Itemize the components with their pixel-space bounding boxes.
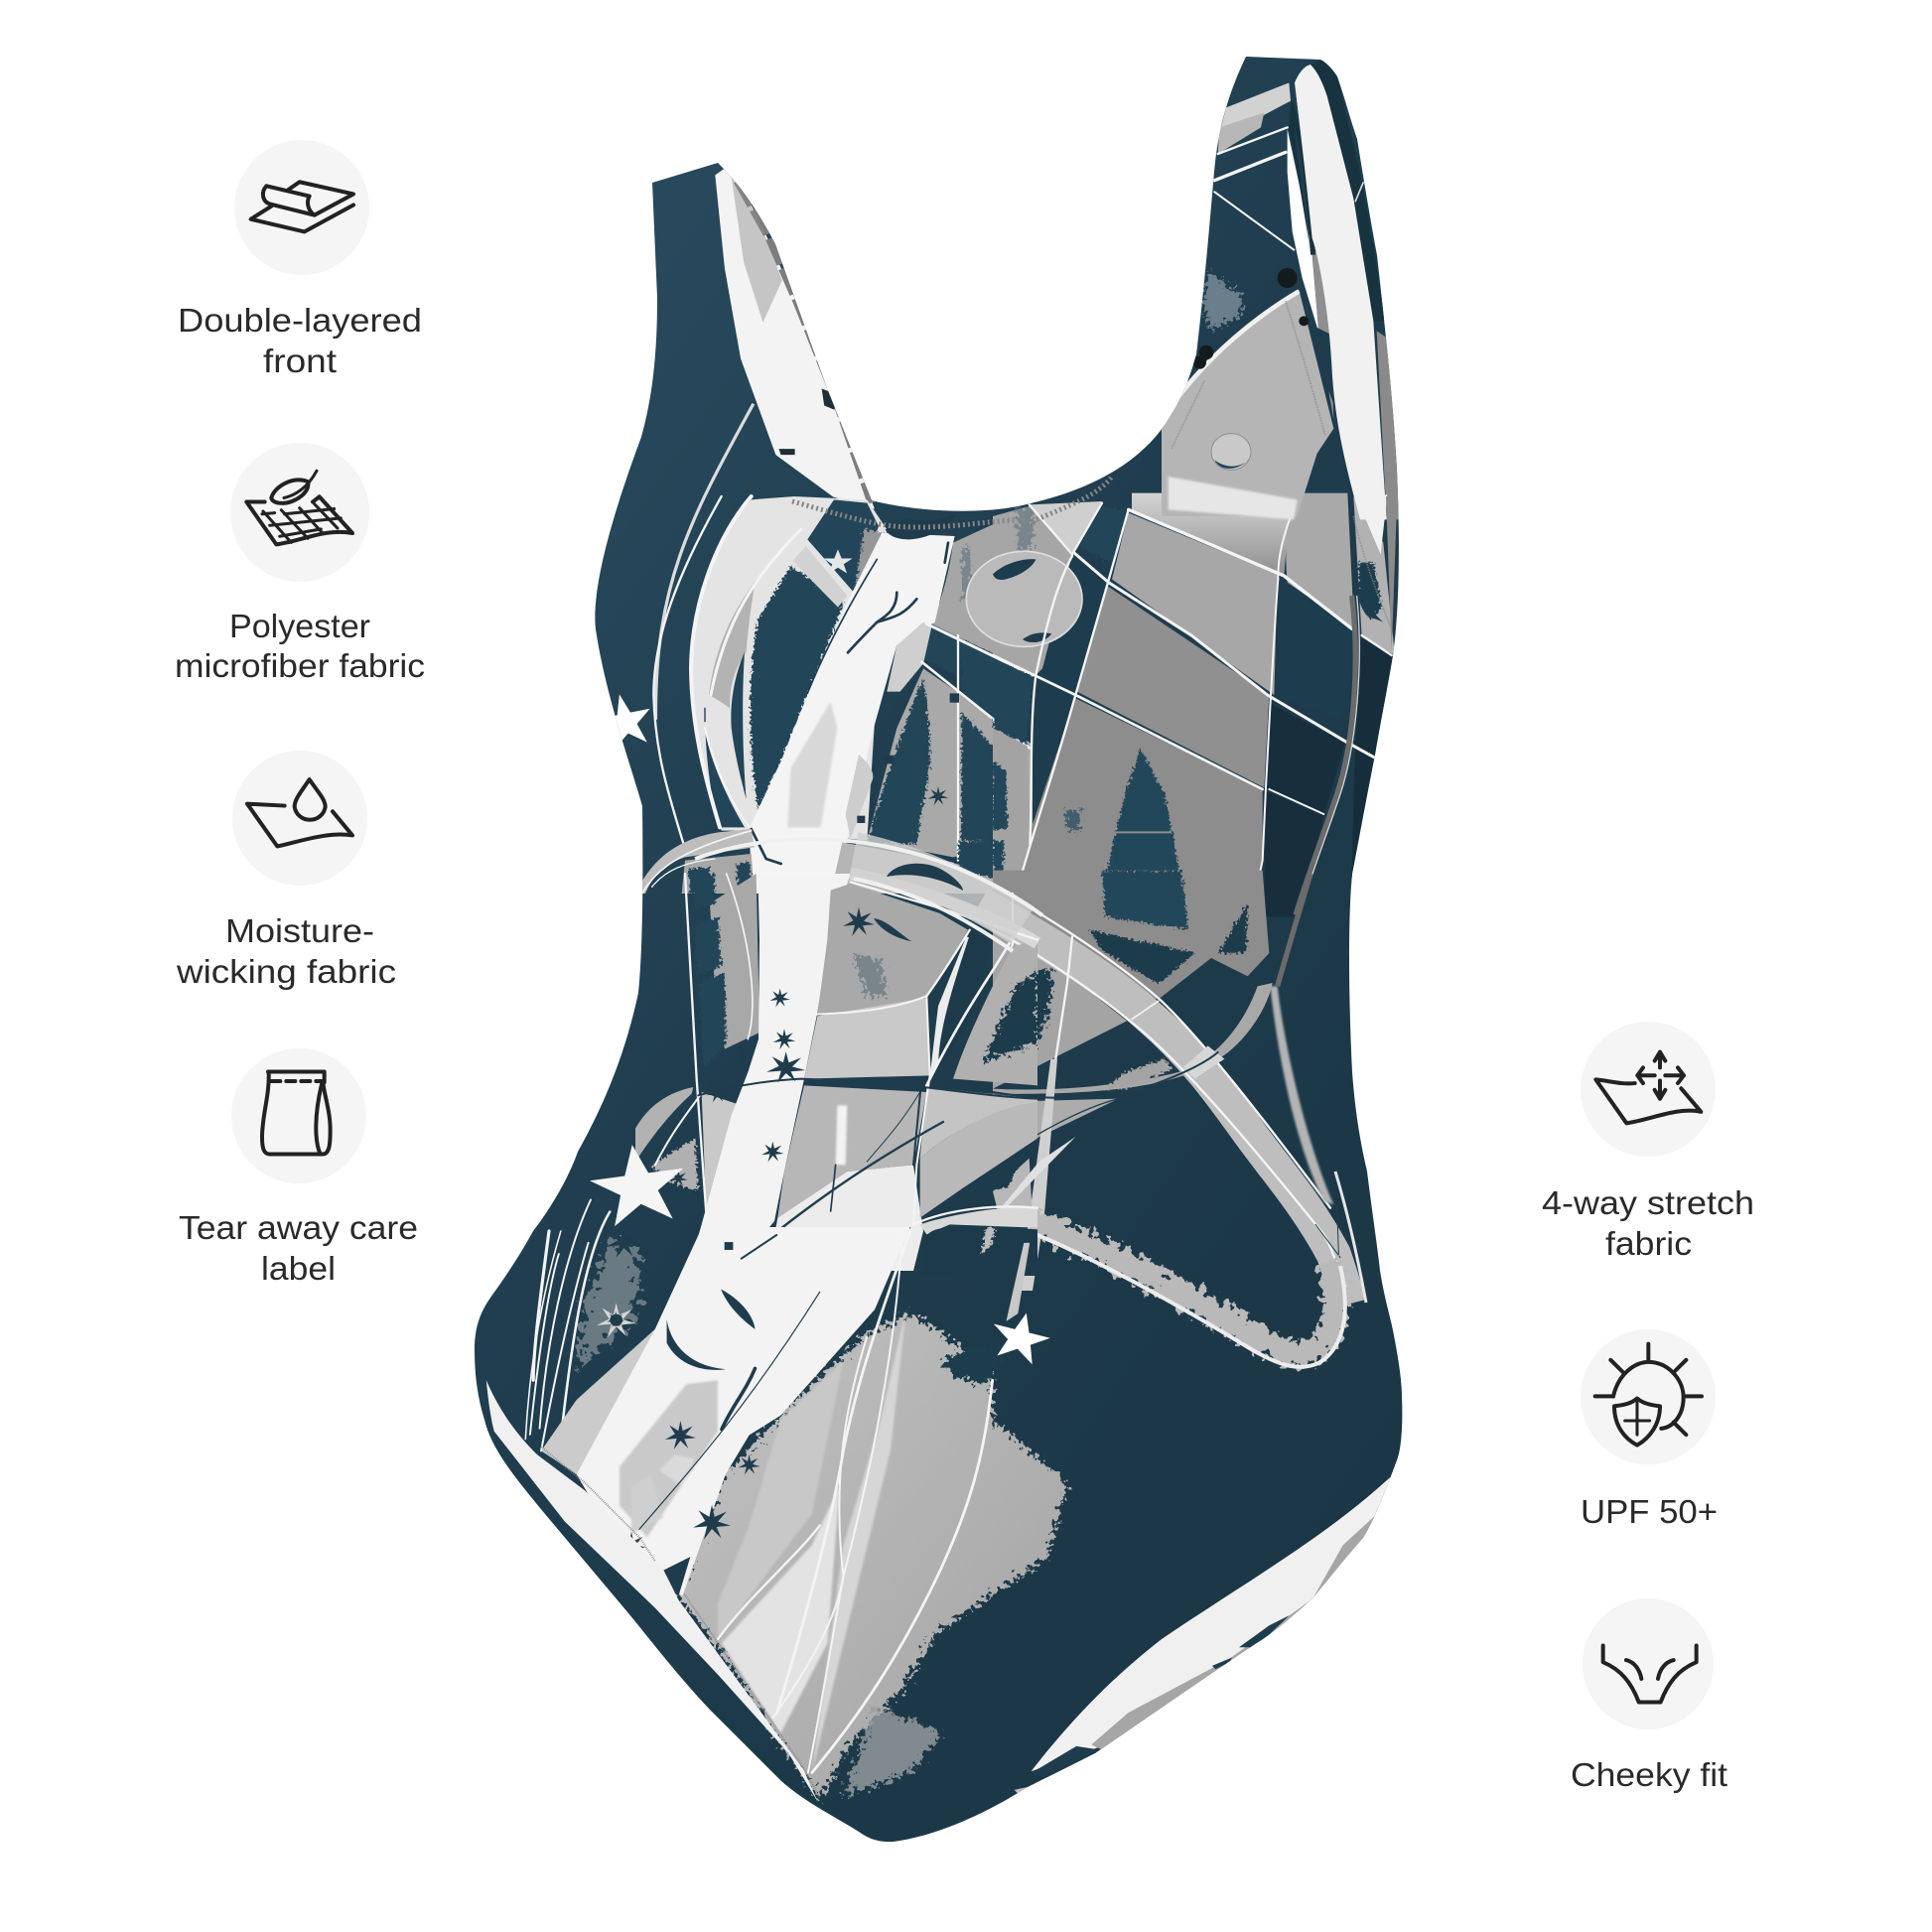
lighter veil pane	[804, 998, 930, 1079]
grey pane right	[953, 940, 1037, 1085]
left feature: Polyester microfiber fabric	[175, 443, 425, 684]
print: lower ribbon loop	[1033, 1172, 1366, 1367]
white veil strand	[930, 936, 976, 1079]
mesh patch left	[578, 1236, 638, 1368]
pale grey wedge beside band	[887, 622, 931, 692]
white web lines	[653, 496, 1033, 864]
teal slit in fan	[961, 1149, 1026, 1191]
dark triangle in pane C	[1099, 748, 1188, 916]
label: Double-layered front	[178, 302, 422, 379]
top dark wedge with star	[807, 499, 879, 593]
icon: four arrows on fabric	[1595, 1052, 1701, 1123]
right feature: UPF 50+	[1581, 1329, 1718, 1530]
speckled streak on pane	[1016, 506, 1035, 553]
bright arcs top right	[851, 874, 1037, 943]
hem smudges	[564, 1486, 645, 1559]
white highlight strip	[836, 1105, 847, 1165]
dark speckled blob	[983, 973, 1037, 1062]
arc lower edge	[854, 879, 1013, 951]
light grey smear in loop	[981, 1228, 996, 1254]
label: UPF 50+: UPF 50+	[1581, 1493, 1718, 1530]
grey pane under strap	[1286, 493, 1354, 628]
print: right leg lining	[1015, 1471, 1407, 1793]
dark branches	[698, 1079, 1037, 1261]
strap end grey	[1386, 496, 1397, 652]
pane C	[1013, 698, 1263, 915]
icon: water drop on fabric	[247, 779, 352, 847]
dark wedge in lower left	[651, 1557, 690, 1596]
neckline stitching	[792, 477, 1112, 527]
lower thin diagonal wedge	[993, 1137, 1075, 1218]
grey ribbon strand	[709, 581, 756, 708]
bust crescent	[887, 864, 963, 891]
icon circle: UPF	[1581, 1329, 1716, 1464]
square specks	[857, 693, 959, 823]
diagonal light band	[792, 546, 847, 608]
grey crescent left	[635, 1087, 693, 1162]
print: neckline and centre tile	[635, 496, 1033, 894]
dark branch marks	[705, 543, 948, 871]
wedge under strap	[1353, 496, 1395, 655]
strap streak	[1355, 182, 1363, 202]
dark sliver	[731, 652, 747, 799]
left feature: Tear away care label	[179, 1048, 418, 1287]
pane A	[1112, 513, 1278, 695]
label: Tear away care label	[179, 1209, 418, 1287]
dark speckled blob	[1002, 966, 1051, 1065]
dark splats	[613, 1231, 760, 1540]
grey veil below branch	[777, 1085, 926, 1218]
right feature: 4-way stretch fabric	[1542, 1022, 1754, 1262]
label: Tear away care label: Tear away care	[179, 1209, 418, 1246]
left feature: Moisture-wicking fabric	[176, 751, 396, 990]
label: Polyester microfiber fabric: microfiber fabric	[175, 647, 425, 684]
black spots	[1193, 268, 1309, 369]
loop band	[1033, 1223, 1335, 1353]
speck column in pane C	[1055, 809, 1080, 900]
grey pane with splat	[817, 884, 968, 1015]
left leg lining	[486, 1380, 818, 1802]
print: left strap and shoulder	[594, 166, 875, 751]
grey print below dark band	[1312, 251, 1333, 420]
dark pane far right	[1350, 638, 1393, 926]
small grey wedge by band	[846, 755, 873, 839]
light pane below neckline	[1132, 493, 1291, 576]
light band at pane bottom	[1169, 477, 1298, 519]
vertical stripe	[1018, 1059, 1057, 1291]
print: lower right of waist	[980, 871, 1348, 1304]
pane B	[1077, 586, 1269, 787]
label: Double-layered front: front	[263, 343, 337, 379]
white lining strip	[1032, 1471, 1407, 1771]
grey pane right of centre	[931, 507, 1031, 653]
strand top right	[1278, 874, 1311, 986]
white web lines	[993, 496, 1392, 915]
arc band A edge highlights	[993, 887, 1347, 1291]
blot top dark speck around star	[941, 1345, 1008, 1384]
back panel white lines	[1214, 127, 1294, 250]
print: right strap and back panel	[1162, 60, 1400, 519]
icon: feather on woven fabric	[246, 471, 352, 544]
label: Polyester microfiber fabric: Polyester	[229, 608, 370, 644]
star centre near mesh	[610, 1314, 622, 1326]
right fading line	[1270, 986, 1333, 1204]
continuing pane C	[993, 871, 1269, 1000]
loop bright lower edge	[1033, 1233, 1345, 1367]
icon circle: stretch	[1581, 1022, 1716, 1157]
splats on band	[669, 907, 911, 1250]
small bubble crescent	[1214, 459, 1249, 469]
dark panes, rough edges	[867, 626, 1033, 844]
bubble crescents	[993, 559, 1051, 642]
left leg stitching	[541, 1447, 820, 1798]
dark sliver pane	[1034, 680, 1074, 786]
loop interior dark	[921, 1227, 1037, 1276]
speckled dark on grey column	[993, 761, 1008, 884]
outer dark band	[1311, 60, 1385, 321]
white wedge at neck	[1030, 501, 1102, 553]
arc band A	[980, 903, 1348, 1304]
icon: cheeky bottom cut	[1603, 1645, 1697, 1702]
splats on hip	[606, 1226, 641, 1258]
white band	[688, 874, 851, 1271]
label: Moisture-wicking fabric: Moisture-	[225, 912, 374, 949]
grey pane under armhole	[1162, 290, 1333, 516]
dark pane right 2	[1267, 703, 1345, 816]
smear below band	[1105, 1059, 1172, 1089]
bubble	[966, 551, 1082, 646]
lower-right white star	[987, 1307, 1054, 1367]
left column under bubble	[993, 658, 1033, 745]
label: Moisture-wicking fabric	[176, 912, 396, 990]
neckline crescent	[886, 528, 931, 540]
label: 4-way stretch fabric	[1542, 1184, 1754, 1262]
grey right fan	[920, 1102, 1037, 1218]
veil panes	[620, 1310, 906, 1772]
dark strip under waist arc	[688, 862, 753, 894]
label: 4-way stretch fabric: fabric	[1605, 1225, 1692, 1262]
star ring near mesh	[597, 1303, 635, 1337]
left strap dark marks	[779, 388, 838, 455]
grey lower left	[993, 1099, 1119, 1162]
dark columns left of band	[694, 874, 727, 1069]
stripe above star	[1006, 1243, 1030, 1321]
far-left grey pane with bubble	[993, 506, 1072, 675]
light tick near crotch	[1015, 1785, 1037, 1793]
lower veil fan	[767, 1165, 923, 1271]
icon circle: moisture	[232, 751, 367, 886]
dark pane right 1	[1278, 587, 1351, 718]
dark branches	[639, 1235, 820, 1529]
swimsuit body base	[475, 57, 1402, 1842]
icon: tear away label	[262, 1071, 331, 1155]
small neck star	[823, 549, 853, 573]
left strap grey print edge	[738, 181, 872, 503]
dark print under strap	[1358, 563, 1382, 619]
dark pane inside loop	[1165, 960, 1248, 1033]
grey stripe across triangle	[1105, 829, 1172, 835]
label: Double-layered front: Double-layered	[178, 302, 422, 339]
dark diamond on strap print	[1317, 328, 1333, 404]
label: Polyester microfiber fabric	[175, 608, 425, 684]
dark blob in pane C	[1102, 871, 1188, 930]
white rim of pane	[1178, 291, 1299, 397]
label: Tear away care label: label	[261, 1250, 336, 1287]
white web lines	[655, 874, 1037, 1224]
left ribbon base	[690, 496, 887, 841]
thin line on left side	[655, 404, 754, 720]
print: waist arc across the body	[695, 839, 1042, 951]
star on left side	[616, 695, 649, 743]
dark slit	[938, 930, 993, 1069]
left strap lining	[715, 166, 875, 509]
grey arc right of band	[835, 842, 993, 894]
thin strand along armhole	[1296, 596, 1355, 915]
speckle patch on back panel	[1203, 271, 1243, 331]
veil wedge left of white band	[702, 1092, 742, 1221]
label: 4-way stretch fabric: 4-way stretch	[1542, 1184, 1754, 1221]
dark wedge upper right	[1218, 903, 1248, 953]
arc upper edge	[695, 839, 1042, 915]
grey panel left of white	[541, 1329, 667, 1474]
dark branches	[993, 1052, 1340, 1258]
soft grey in white band	[787, 702, 837, 827]
band B fade	[993, 983, 1273, 1094]
dark crescent in wedge	[1358, 593, 1383, 622]
see-through sliver	[1288, 129, 1318, 333]
light line over strand	[1299, 596, 1359, 915]
speckled tail of blot	[843, 1706, 941, 1796]
central white mass	[577, 1227, 910, 1596]
pane lower right dark	[1264, 791, 1323, 916]
lower grey pane	[867, 668, 1033, 857]
white strap band	[1295, 65, 1387, 519]
splat on pane	[928, 786, 948, 805]
label: Cheeky fit: Cheeky fit	[1571, 1756, 1727, 1793]
print: upper right tile	[966, 493, 1395, 926]
grey strands left	[530, 1199, 610, 1435]
speckle below splat	[854, 953, 887, 996]
light strip right	[920, 1207, 1037, 1234]
icon circle: microfiber	[230, 443, 369, 582]
icon circle: care label	[231, 1048, 366, 1183]
icon: layered fabric	[251, 182, 353, 231]
label: Moisture-wicking fabric: wicking fabric	[176, 953, 396, 990]
icon circle: fit	[1583, 1598, 1714, 1729]
cross knot	[1183, 1045, 1224, 1079]
grey mix left of band	[710, 874, 759, 1049]
grey lower ribbon	[767, 695, 834, 827]
print: central lower tile	[635, 874, 1037, 1276]
waist arc band left	[635, 829, 755, 894]
grey column lower left	[993, 728, 1030, 897]
print: left hip with big star	[530, 1139, 691, 1435]
grey speckled neck patch	[856, 529, 886, 588]
left feature: Double-layered front	[178, 140, 422, 379]
print: lower body tile	[486, 1227, 1067, 1802]
big left-side white star	[586, 1139, 691, 1229]
dark wedge left bottom	[706, 735, 745, 827]
white strap taper	[1355, 494, 1387, 554]
arc band	[854, 854, 1023, 925]
dark band	[1089, 930, 1194, 985]
icon circle: layers	[234, 140, 369, 275]
strap back dark band	[1289, 101, 1311, 251]
big grey paint blot	[678, 1313, 1067, 1800]
left strap shaded print	[731, 175, 782, 323]
dark triangle with bubble	[1042, 558, 1107, 690]
grey region with dark blob	[993, 930, 1127, 1089]
dark pane between ribbons and band	[751, 566, 844, 809]
lower grey patch left of stripe	[993, 1159, 1033, 1218]
grey band under branch	[920, 1087, 1037, 1159]
grey stripe along outer edge	[1091, 1508, 1383, 1749]
print: armhole wedge lower	[1353, 494, 1397, 652]
abstract print clipped to the swimsuit	[486, 60, 1407, 1802]
swimsuit product photo	[475, 57, 1407, 1842]
grey under stripes	[1218, 112, 1264, 154]
white web lines	[525, 1231, 993, 1772]
dark patches on strip	[1032, 1615, 1290, 1780]
star ring in mesh	[607, 1311, 624, 1327]
right feature: Cheeky fit	[1571, 1598, 1727, 1793]
icon: sun and shield	[1595, 1344, 1702, 1446]
waist arc highlights	[642, 831, 752, 894]
small bubble	[1211, 434, 1251, 470]
grey splash above star	[652, 1139, 698, 1191]
dark pane under cone	[957, 837, 993, 880]
speckled edge on grey pane	[961, 546, 973, 603]
dark neck pane	[1079, 506, 1129, 564]
thin line past the loop	[1335, 1172, 1366, 1303]
outer grey strip	[1377, 331, 1400, 519]
grey mix under waist arc	[682, 854, 755, 894]
central white band	[750, 533, 955, 894]
inner dark band	[1291, 99, 1315, 255]
stitching on pane	[1172, 301, 1325, 449]
back panel stripes	[1221, 82, 1291, 127]
stitching around armhole	[1353, 516, 1392, 628]
